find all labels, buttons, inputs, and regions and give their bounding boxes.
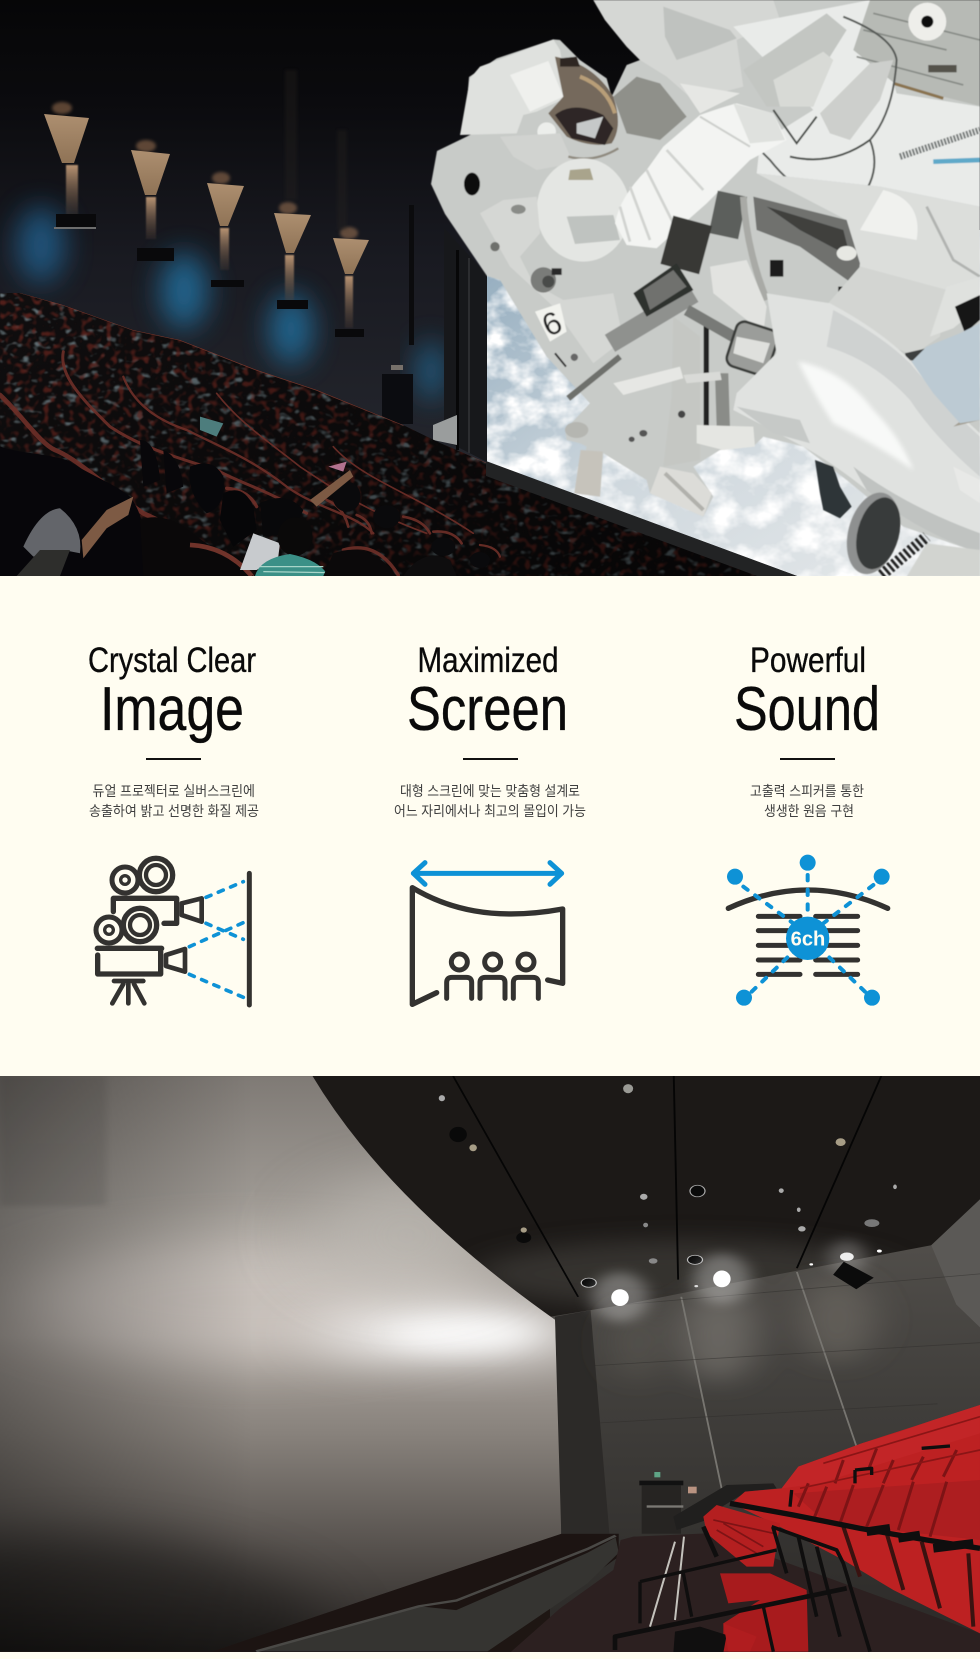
wall mounted speaker — [833, 1262, 874, 1289]
life support pack — [593, 0, 780, 100]
number 6 label: 6 — [536, 304, 567, 344]
wall lights and glows — [17, 70, 445, 401]
divider — [780, 758, 835, 760]
heading: screen — [407, 641, 568, 744]
raised arm sleeve — [615, 103, 787, 248]
dangling tether bag — [815, 460, 852, 518]
side wall — [550, 1199, 980, 1651]
suit leg — [733, 293, 980, 553]
astronaut figure — [431, 0, 980, 580]
description: image — [89, 783, 259, 819]
feature: powerful sound — [727, 641, 890, 1006]
panel: top photo of theatre with astronaut on screen — [0, 0, 980, 580]
icon: 6 channel speakers: 6ch — [791, 929, 825, 951]
divider — [463, 758, 518, 760]
aisle lights — [650, 1537, 684, 1627]
seat row curves — [0, 293, 500, 576]
divider — [146, 758, 201, 760]
carpet floor — [510, 1533, 980, 1653]
heading: image: Crystal Clear — [88, 641, 256, 680]
description: sound: 고출력 스피커를 통한 — [750, 783, 864, 799]
earth clouds on the screen — [487, 230, 980, 576]
seating, rails and floor — [510, 1405, 980, 1653]
exit door — [639, 1472, 697, 1534]
auditorium wall — [0, 0, 980, 576]
dark carpet below screen — [550, 1534, 619, 1569]
low barrier wall — [256, 1536, 619, 1651]
ceiling light wash — [475, 1240, 900, 1308]
feature: crystal clear image — [88, 641, 259, 1005]
red seat block — [703, 1405, 980, 1652]
suit silhouette — [431, 0, 980, 553]
icon: 6 channel speakers — [727, 855, 890, 1006]
black railings — [615, 1446, 980, 1652]
gap of sky between limbs — [912, 323, 980, 423]
description: screen: 대형 스크린에 맞는 맞춤형 설계로 — [400, 783, 580, 799]
back pack panels and dark tray — [753, 173, 980, 362]
screen frame — [486, 461, 797, 576]
heading: image — [88, 641, 256, 744]
speaker column, door and curtain — [382, 205, 487, 462]
folded tool bags — [762, 13, 980, 186]
heading: screen: Screen — [407, 675, 568, 744]
heading: sound: Sound — [734, 675, 880, 744]
wall seams — [681, 1272, 856, 1490]
description: screen — [394, 783, 586, 819]
description: sound: 생생한 원음 구현 — [764, 803, 854, 819]
heading: sound — [734, 641, 880, 744]
description: sound — [750, 783, 864, 819]
description: image: 듀얼 프로젝터로 실버스크린에 — [92, 783, 255, 799]
icon: dual projectors — [96, 858, 249, 1005]
bright fabric background — [733, 0, 980, 207]
crowd of seated viewers — [0, 280, 800, 576]
helmet and visor — [460, 39, 618, 170]
ceiling seams and fixtures — [439, 1076, 897, 1297]
bag on floor — [673, 1627, 727, 1653]
panel: bottom photo of empty curved screen hall — [0, 1076, 980, 1659]
feature: maximized screen — [394, 641, 586, 1004]
heading: image: Image — [100, 675, 244, 744]
number 6 label — [535, 303, 578, 367]
foreground heads and shoulders — [0, 417, 490, 576]
heading: sound: Powerful — [750, 641, 866, 680]
ceiling — [250, 1076, 980, 1343]
wall light spill — [612, 1278, 875, 1381]
ceiling spotlights — [592, 1240, 882, 1322]
icon: curved screen with audience — [412, 863, 563, 1004]
station module with target mark — [853, 0, 980, 106]
curved projection screen — [0, 1076, 581, 1659]
tool arm and equipment — [565, 191, 780, 517]
heading: screen: Maximized — [418, 641, 558, 680]
description: screen: 어느 자리에서나 최고의 몰입이 가능 — [394, 803, 586, 819]
round hatch device — [838, 487, 980, 580]
torso panels — [464, 158, 630, 363]
photo backing — [0, 1076, 980, 1652]
stair rail wall — [673, 1483, 777, 1530]
panel: three features — [88, 641, 890, 1006]
description: image: 송출하여 밝고 선명한 화질 제공 — [89, 803, 259, 819]
